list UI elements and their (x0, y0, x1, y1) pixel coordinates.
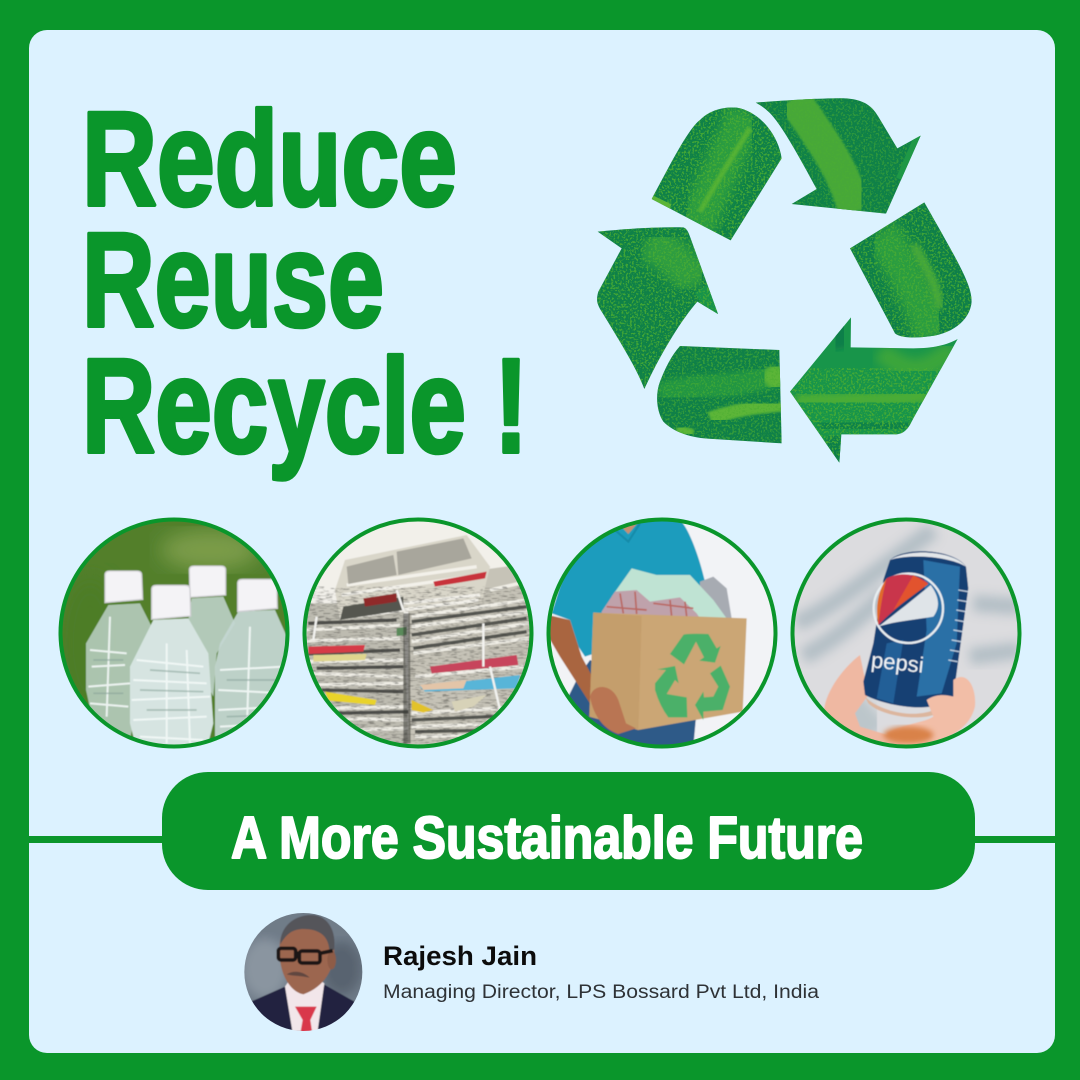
bottle shapes (86, 597, 288, 750)
name and job title (383, 941, 819, 1003)
printed columns on the top paper (347, 538, 472, 584)
icon: textured green recycling symbol (595, 95, 977, 465)
pepsi logo (874, 574, 943, 643)
banner pill: A More Sustainable Future (162, 772, 975, 890)
clothes in box (698, 577, 732, 618)
photo: hand holding blue soda can: pepsi (870, 647, 925, 678)
photo frame rings (60, 520, 1020, 746)
glasses (278, 948, 333, 963)
photo: hand holding blue soda can (790, 517, 1023, 750)
name and job title: Managing Director, LPS Bossard Pvt Ltd, India (383, 982, 819, 1003)
title: Reduce Reuse Recycle: Reuse (82, 206, 384, 355)
photo: plastic bottles (57, 517, 290, 750)
hand on box (590, 687, 636, 734)
fingers left (824, 655, 933, 748)
photo: person holding recycling box of clothes (548, 520, 775, 747)
jeans (568, 660, 697, 747)
tie (295, 1007, 317, 1033)
banner pill: A More Sustainable Future: A More Sustainable Future (231, 805, 863, 871)
soda can (866, 698, 933, 718)
hair (280, 915, 334, 950)
left arm (550, 615, 592, 704)
photo: stacked newspapers (305, 520, 533, 747)
title: Reduce Reuse Recycle: Reduce (82, 85, 457, 234)
cardboard box (589, 613, 747, 730)
hand fingers right (887, 677, 975, 747)
photo circles row (57, 517, 533, 750)
suit (252, 984, 354, 1030)
coloured magazine strips (308, 645, 365, 654)
bottle caps (105, 566, 277, 619)
title: Reduce Reuse Recycle (82, 85, 528, 481)
divider line (29, 836, 1055, 843)
face (279, 925, 334, 994)
portrait: Rajesh Jain (242, 912, 365, 1035)
moustache and mouth (287, 972, 310, 978)
name and job title: Rajesh Jain (383, 941, 537, 971)
neck and shirt (285, 977, 324, 1031)
box recycling symbol (655, 634, 730, 720)
teal shirt (552, 520, 705, 657)
title: Reduce Reuse Recycle: Recycle ! (82, 332, 528, 481)
